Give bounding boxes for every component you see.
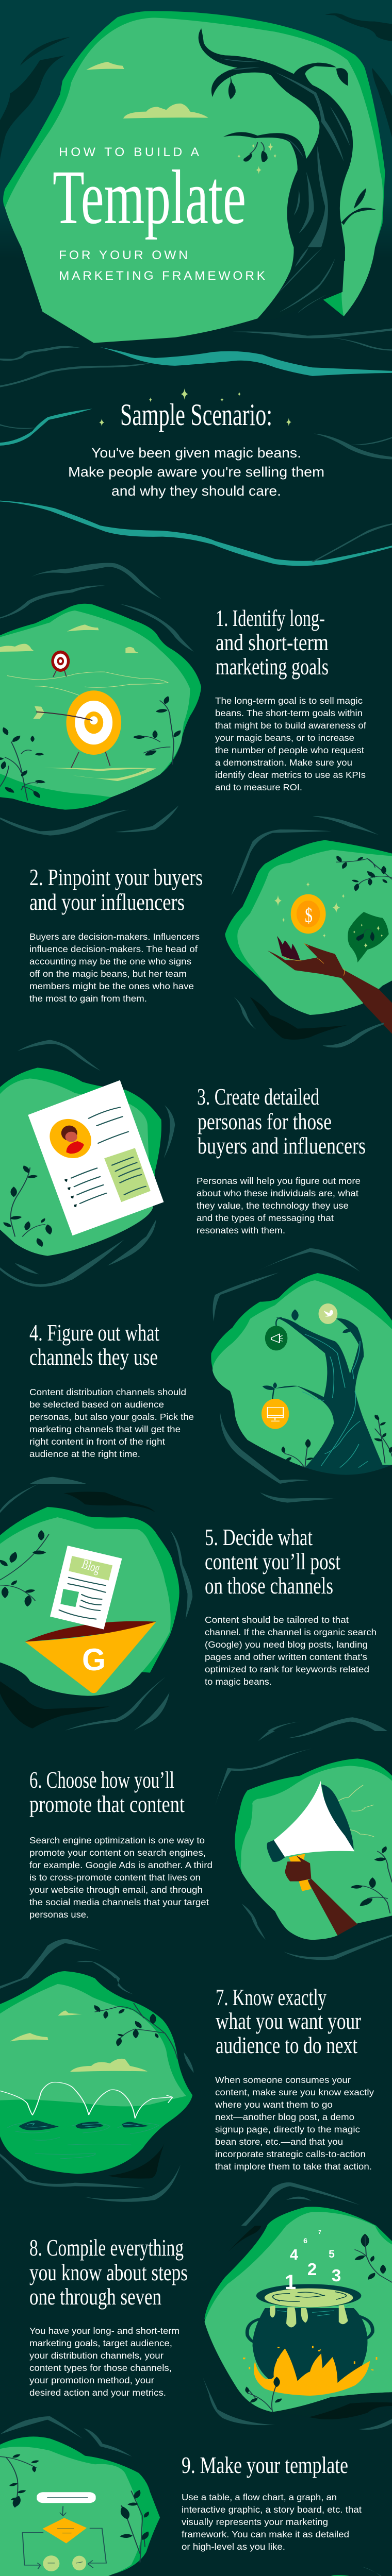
numbers rising from cauldron: 7 [318, 2230, 321, 2235]
panel: step 3 [0, 1040, 366, 1287]
heading: step 5: on those channels [205, 1572, 333, 1599]
body: step 4: be selected based on audience [29, 1399, 164, 1410]
body: step 4 [29, 1387, 194, 1459]
body: step 9 [182, 2492, 362, 2552]
body: step 7: next—another blog post, a demo [215, 2112, 354, 2122]
body: step 5: pages and other written content that’s [205, 1652, 367, 1662]
body: step 2: influence decision-makers. The head of [29, 944, 198, 954]
body: step 9: or high-level as you like. [182, 2541, 285, 2552]
body: step 1 [215, 696, 366, 792]
body: step 1: identify clear metrics to use as KPIs [215, 770, 366, 780]
illustration: blog post dropping into Google funnel [0, 1484, 387, 1731]
title: for your own: FOR YOUR OWN [59, 248, 188, 262]
numbers rising from cauldron: 5 [329, 2248, 335, 2260]
body: step 5: (Google) you need blog posts, landing [205, 1639, 368, 1650]
body: step 2 [29, 931, 200, 1004]
scenario text: and why they should care. [111, 483, 281, 499]
body: step 4: Content distribution channels should [29, 1387, 186, 1397]
body: step 8 [29, 2326, 179, 2398]
heading: step 2 [29, 864, 203, 915]
body: step 6: Search engine optimization is one way to [29, 1835, 205, 1845]
body: step 7: bean store, etc.—and that you [215, 2137, 343, 2147]
body: step 4: right content in front of the right [29, 1436, 165, 1447]
body: step 2: accounting may be the one who signs [29, 956, 191, 967]
heading: step 8: you know about steps [29, 2259, 188, 2285]
body: step 9: Use a table, a flow chart, a graph, an [182, 2492, 337, 2502]
numbers rising from cauldron: 6 [303, 2236, 307, 2245]
body: step 9: framework. You can make it as detailed [182, 2529, 349, 2539]
body: step 1: beans. The short-term goals within [215, 708, 363, 718]
panel: step 4 [0, 1240, 392, 1484]
heading: step 4: channels they use [29, 1344, 158, 1370]
body: step 6: your website through email, and through [29, 1885, 203, 1895]
numbers rising from cauldron: 4 [290, 2247, 298, 2263]
scenario text: Make people aware you're selling them [68, 464, 324, 480]
heading: step 2: 2. Pinpoint your buyers [29, 864, 203, 890]
heading: step 7 [216, 1984, 361, 2058]
body: step 4: personas, but also your goals. Pick the [29, 1412, 194, 1422]
body: step 5: channel. If the channel is organic search [205, 1627, 377, 1637]
illustration: targets and arrow [0, 501, 392, 810]
google G: G [82, 1642, 106, 1677]
panel: step 7 [0, 1971, 374, 2226]
body: step 1: your magic beans, or to increase [215, 733, 354, 743]
body: step 5: Content should be tailored to that [205, 1615, 349, 1625]
body: step 2: Buyers are decision-makers. Influencers [29, 931, 200, 942]
body: step 8: You have your long- and short-term [29, 2326, 179, 2336]
heading: step 8 [29, 2234, 188, 2310]
body: step 3: about who these individuals are, what [197, 1188, 358, 1198]
panel: step 8 [29, 2207, 392, 2430]
heading: step 6: promote that content [29, 1791, 185, 1817]
heading: step 1: and short-term [216, 629, 329, 655]
coin dollar sign: $ [305, 904, 313, 927]
heading: step 7: 7. Know exactly [216, 1984, 326, 2010]
scenario text: You've been given magic beans. [91, 445, 301, 461]
numbers rising from cauldron: 2 [307, 2260, 317, 2279]
panel: step 6 [21, 1731, 392, 1978]
blog label: Blog [80, 1556, 102, 1576]
body: step 1: that might be to build awareness of [215, 720, 366, 731]
body: step 6: the social media channels that your target [29, 1897, 209, 1907]
body: step 7: content, make sure you know exactly [215, 2087, 374, 2097]
illustration: flow chart [0, 2416, 160, 2576]
body: step 3 [197, 1176, 361, 1235]
body: step 9: interactive graphic, a story board, etc. that [182, 2504, 362, 2515]
body: step 3: they value, the technology they use [197, 1200, 349, 1211]
body: step 4: marketing channels that will get the [29, 1424, 181, 1434]
illustration: hands and magic beans [160, 2567, 392, 2576]
panel: step 10 [29, 2567, 392, 2576]
illustration: cauldron over fire [203, 2207, 392, 2430]
heading: step 1: marketing goals [216, 653, 329, 680]
body: step 1: and to measure ROI. [215, 782, 302, 792]
panel: step 2 [0, 805, 392, 1047]
heading: step 4: 4. Figure out what [29, 1319, 159, 1346]
panel: step 9 [0, 2416, 362, 2576]
body: step 1: a demonstration. Make sure you [215, 757, 352, 768]
illustration: channel tree [0, 1240, 392, 1484]
illustration: bouncing arrow over stones [0, 1971, 360, 2226]
numbers rising from cauldron: 1 [285, 2271, 296, 2294]
body: step 8: content types for those channels, [29, 2363, 172, 2373]
body: step 7: When someone consumes your [215, 2075, 351, 2085]
title: marketing framework: MARKETING FRAMEWORK [59, 269, 266, 283]
body: step 9: visually represents your marketing [182, 2517, 328, 2527]
body: step 7: incorporate strategic calls-to-action [215, 2149, 366, 2159]
illustration: hand with coin and beans [0, 805, 392, 1047]
body: step 3: resonates with them. [197, 1225, 285, 1235]
heading: step 6 [29, 1767, 185, 1817]
body: step 6: for example. Google Ads is another. A third [29, 1860, 213, 1870]
heading: step 8: 8. Compile everything [29, 2234, 184, 2261]
heading: step 3: 3. Create detailed [197, 1083, 319, 1110]
body: step 7: where you want them to go [215, 2099, 333, 2110]
scenario text [68, 445, 324, 499]
heading: step 2: and your influencers [29, 889, 185, 915]
body: step 3: Personas will help you figure out more [197, 1176, 361, 1186]
heading: step 5 [205, 1524, 340, 1599]
heading: step 3 [197, 1083, 366, 1159]
heading: sample scenario: Sample Scenario: [120, 398, 272, 432]
body: step 6: is to cross-promote content that lives on [29, 1872, 201, 1883]
numbers rising from cauldron [285, 2230, 341, 2294]
heading: step 9: 9. Make your template [182, 2452, 348, 2478]
body: step 1: the number of people who request [215, 745, 364, 755]
heading: step 8: one through seven [29, 2283, 161, 2310]
heading: step 4 [29, 1319, 159, 1370]
heading: step 6: 6. Choose how you’ll [29, 1767, 174, 1793]
panel: title hero [0, 11, 392, 343]
body: step 8: your distribution channels, your [29, 2350, 164, 2361]
body: step 2: off on the magic beans, but her team [29, 969, 187, 979]
body: step 8: desired action and your metrics. [29, 2387, 166, 2398]
body: step 6 [29, 1835, 213, 1920]
numbers rising from cauldron: 3 [332, 2266, 341, 2285]
title: template: Template [53, 155, 246, 240]
body: step 5: optimized to rank for keywords related [205, 1664, 369, 1674]
panel: step 1 [0, 501, 392, 810]
body: step 6: promote your content on search engines, [29, 1848, 206, 1858]
illustration: hand holding megaphone [21, 1731, 392, 1978]
body: step 4: audience at the right time. [29, 1449, 140, 1459]
body: step 3: and the types of messaging that [197, 1213, 334, 1223]
body: step 2: the most to gain from them. [29, 993, 147, 1004]
decorative streaks and sparkles [0, 328, 392, 460]
heading: step 1 [216, 605, 329, 680]
body: step 7 [215, 2075, 374, 2172]
panel: step 5 [0, 1484, 387, 1731]
heading: step 5: content you’ll post [205, 1548, 340, 1574]
body: step 1: The long-term goal is to sell magic [215, 696, 363, 706]
title: how to build a: HOW TO BUILD A [59, 145, 200, 159]
heading: step 5: 5. Decide what [205, 1524, 313, 1550]
body: step 2: members might be the ones who have [29, 981, 194, 991]
body: step 5: to magic beans. [205, 1676, 272, 1687]
body: step 8: marketing goals, target audience, [29, 2338, 172, 2348]
heading: step 1: 1. Identify long- [216, 605, 325, 631]
illustration: persona document [0, 1040, 175, 1287]
heading: step 3: personas for those [198, 1108, 332, 1134]
illustration: beanstalk scene [0, 11, 392, 343]
body: step 7: that implore them to take that action. [215, 2161, 372, 2172]
body: step 8: your promotion method, your [29, 2375, 154, 2385]
body: step 6: personas use. [29, 1909, 89, 1920]
panel: sample scenario [0, 328, 392, 499]
body: step 7: signup page, directly to the magic [215, 2124, 360, 2134]
body: step 5 [205, 1615, 377, 1687]
